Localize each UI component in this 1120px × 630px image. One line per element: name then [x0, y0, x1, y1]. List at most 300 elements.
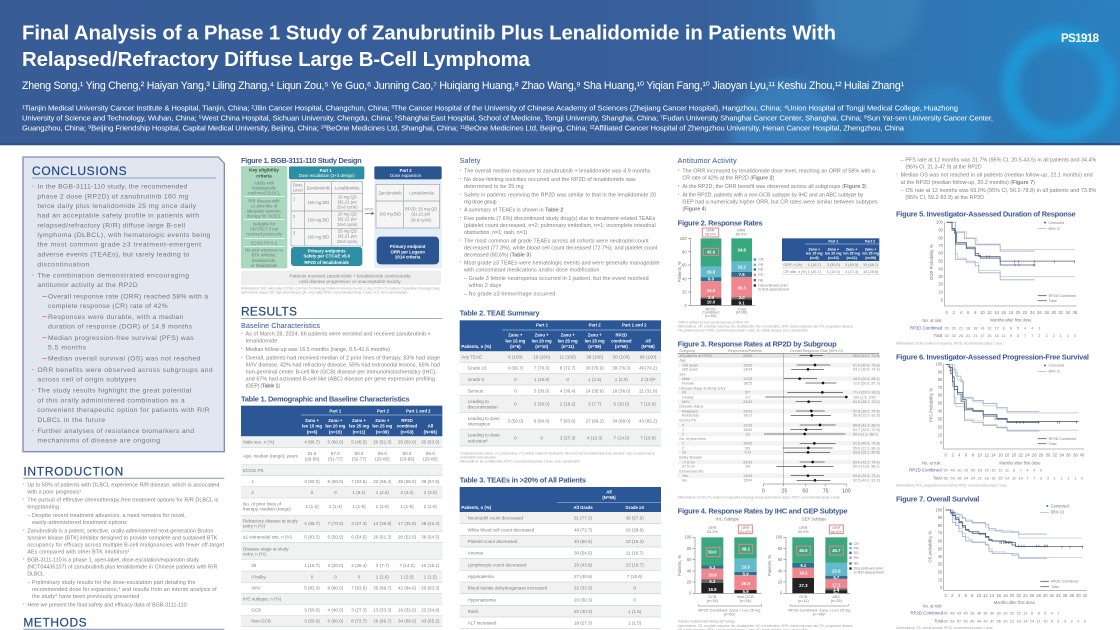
figure 6 number at risk: 15: [985, 469, 989, 473]
figure 2 bar chart: 3.0: [739, 295, 745, 300]
conclusions bullets: relapsed/refractory (R/R) diffuse large B-cell: [37, 222, 185, 229]
forest plot: Refractory: [682, 414, 699, 418]
part 1 dose table: 28-d cycle): [337, 239, 358, 244]
poster title: Relapsed/Refractory Diffuse Large B-Cell Lymphoma: [22, 49, 531, 71]
table 1 body: 4 (66.7): [304, 521, 320, 526]
forest plot: 50.0 (1.3, 98.7): [853, 432, 878, 436]
table 1 body: 3 (7.7): [376, 563, 389, 568]
antitumor bullets: At the RP2D, patients with a non-GCB subtype by IHC and an ABC subtype by: [682, 192, 864, 198]
introduction bullets: with a poor prognosis¹: [26, 489, 81, 495]
antitumor bullets continued: (95% CI, 21.3-47.9) at the RP2D: [905, 164, 982, 170]
part 2 dose table: 160 mg BID: [379, 212, 401, 217]
table 2 body: discontinuation: [468, 404, 498, 409]
figure 5 axes and labels: 20: [1016, 310, 1021, 315]
introduction bullets: BGB-3111-110 is a phase 1, open-label, dose-escalation/expansion study: [27, 558, 199, 564]
figure 6 axes and labels: No. at risk:: [922, 460, 942, 465]
table 1 body: 4 (66.7): [304, 440, 320, 445]
table 1 body: 3 (50.0): [304, 608, 320, 613]
table 1 body: (31-77): [328, 456, 343, 461]
antitumor bullets: (Figure 4): [682, 206, 707, 212]
table 1 header: Zanu +: [352, 418, 367, 423]
results section: [241, 305, 442, 390]
table 2 body: 3 (50.0): [508, 419, 524, 424]
figure 6 axes and labels: 10: [938, 432, 943, 437]
figure 2 ORR table: Zanu +: [846, 247, 857, 251]
affiliations: Guangzhou, China; ⁹Beijing Friendship Hospital, Capital Medical University, Beijing, China; ¹⁰BeOne Medicines Ltd, Shanghai, China; ¹¹BeOne Medicines Ltd, Beijing, China; ¹²Affiliated Cancer Hospital of Zhengzhou University, Henan Cancer Hospital, Zhengzhou, China: [22, 124, 905, 132]
safety bullets: with concomitant medications and/or dose modification: [463, 268, 599, 274]
safety bullets: A summary of TEAEs is shown in Table 2: [464, 208, 563, 214]
table 3 body: 10 (15.2): [626, 539, 644, 544]
figure 2 ORR table: 1 (16.7): [808, 263, 822, 267]
table 1 body: 1 (1-5): [376, 504, 389, 509]
figure 2 ORR table: Zanu +: [809, 247, 820, 251]
figure 6 number at risk: 30: [957, 469, 961, 473]
table 2 body: 6 (100): [508, 354, 523, 359]
table 2 body: 30 (76.9): [586, 366, 604, 371]
safety bullets: ·: [459, 166, 462, 175]
figure 2 ORR table: 10 (25.6): [863, 270, 879, 274]
forest plot: 0: [762, 488, 765, 494]
table 2 body: 7 (14.0): [614, 435, 630, 440]
figure 6 axes and labels: Months after first dose: [999, 460, 1041, 465]
table 2 header: (N=66): [641, 344, 655, 349]
table 2 header: (n=6): [510, 344, 521, 349]
figure 6 axes and labels: 4: [958, 453, 961, 458]
table 1 body: 2 (20.0): [328, 563, 344, 568]
figure 5 legend: Censored: [1048, 221, 1064, 225]
part 2 primary endpoint: ORR per Lugano: [390, 250, 425, 255]
safety bullets: decreased (77.3%), white blood cell count decreased (72.7%), and platelet count: [464, 245, 658, 251]
conclusions bullets: –: [42, 312, 47, 321]
baseline bullets: As of March 28, 2024, 66 patients were enrolled and received zanubrutinib +: [246, 332, 431, 338]
figure 7 number at risk: 6: [1057, 619, 1059, 623]
figure 6 number at risk: 1: [1061, 477, 1063, 481]
figure 6 number at risk: RP2D Combined: [909, 468, 942, 473]
figure 2 title: Figure 2. Response Rates: [678, 218, 763, 227]
figure 1 abbreviations: performance status; HDT, high-dose therapy; QD, once daily; RP2D, recommended phase 2 dose; SCT, stem cell transplant.: [241, 291, 408, 295]
figure 2 bar chart: 15.2: [737, 265, 746, 270]
figure 7 axes and labels: 100: [935, 507, 943, 512]
table 2 body: 0: [514, 389, 517, 394]
safety bullets: The overall median exposure to zanubrutinib + lenalidomide was 4.9 months: [464, 169, 651, 175]
figure 7 number at risk: 2: [1077, 619, 1079, 623]
table 1 body: Disease stage at study: [243, 546, 289, 551]
table 1 body: GCB: [251, 608, 261, 613]
figure 2 bar chart: 2.0: [708, 295, 715, 300]
antitumor bullets continued: Median OS was not reached in all patients (median follow-up, 22.1 months) and: [901, 173, 1093, 179]
treatment note box: Patients received zanubrutinib + lenalidomide continuously: [289, 273, 411, 278]
table 1 body: 7 (14.0): [399, 563, 415, 568]
table 3 body: Rash: [468, 609, 479, 614]
table 2 body: 50 (100): [613, 354, 630, 359]
figure 7 title: Figure 7. Overall Survival: [896, 495, 979, 504]
authors: Zheng Song,¹ Ying Cheng,² Haiyan Yang,³ Liling Zhang,⁴ Liqun Zou,⁵ Ye Guo,⁶ Junning Cao,⁷ Huiqiang Huang,⁸ Zhao Wang,⁹ Sha Huang,¹⁰ Yiqian Fang,¹⁰ Jiaoyan Lyu,¹¹ Keshu Zhou,¹² Huilai Zhang¹: [22, 80, 904, 92]
figure 5 axes and labels: 60: [938, 251, 944, 256]
panel: introduction: [22, 464, 224, 630]
table 3 body: 11 (16.7): [626, 551, 644, 556]
conclusions bullets: –: [42, 354, 47, 363]
figure 6 axes and labels: [922, 361, 1085, 465]
table 2 header: Zanu +: [588, 333, 602, 338]
forest plot: 50: [802, 488, 808, 494]
figure 7 number at risk: 0: [1084, 619, 1086, 623]
figure 6 legend: 95% CI: [1048, 370, 1060, 374]
table 1 body: 55 (83.3): [421, 585, 440, 590]
part 2 dose table: (d1-21 per: [411, 212, 431, 217]
GEP subtype chart: 20: [778, 579, 783, 584]
figure 6 number at risk: 0: [1081, 477, 1083, 481]
figure 5 number at risk: 17: [980, 334, 984, 338]
table 2 header: Part 2: [589, 323, 601, 328]
IHC subtype chart: Non-GCB: [737, 595, 754, 599]
forest plot: Relapsed: [682, 409, 697, 413]
figure 2 bar chart: 34.8: [737, 248, 746, 253]
IHC subtype chart: 60: [687, 557, 692, 562]
GEP subtype chart: 60: [778, 557, 783, 562]
figure 6 axes and labels: 14: [991, 453, 996, 458]
key eligibility criteria: HDT/SCT if not: [250, 226, 279, 231]
table 1 body: 1 (1.5): [424, 574, 437, 579]
table 2 body: 66 (100): [640, 354, 657, 359]
table 3 body: 18 (27.3): [574, 621, 593, 626]
figure 7 axes and labels: 18: [1003, 593, 1008, 598]
figure 2 bar chart: [677, 228, 789, 318]
poster title: Final Analysis of a Phase 1 Study of Zanubrutinib Plus Lenalidomide in Patients With: [22, 22, 836, 44]
forest plot: [678, 349, 880, 494]
figure 6 axes and labels: 80: [938, 377, 943, 382]
table 3 body: 40 (60.6): [574, 539, 593, 544]
GEP subtype chart: 5.7: [833, 589, 840, 594]
figure 5 number at risk: 24: [959, 334, 964, 338]
table 3 body: 22 (33.3): [574, 586, 593, 591]
table 1 header: (n=6): [307, 429, 318, 434]
table 1 body: 1 (16.7): [304, 563, 320, 568]
figure 7 number at risk: 29: [1003, 619, 1007, 623]
antitumor activity heading: Antitumor Activity: [678, 157, 737, 165]
part 2 dose table: [376, 184, 440, 228]
part 1 dose table: 1: [293, 197, 296, 202]
table 1 header: len 25 mg: [372, 424, 393, 429]
figure 5 number at risk: 8: [1010, 326, 1012, 330]
IHC subtype chart: 0: [689, 591, 692, 596]
part 1 header: [289, 166, 364, 179]
table 1 body: 22 (56.4): [373, 479, 392, 484]
figure 5 number at risk: 9: [1010, 334, 1012, 338]
table 2 body: 4 (10.3): [587, 435, 603, 440]
baseline bullets: lenalidomide: [246, 339, 277, 345]
introduction bullets: The pursuit of effective chemotherapy-free treatment options for R/R DLBCL is: [27, 498, 219, 504]
figure 5 axes and labels: No. at risk:: [922, 318, 942, 323]
figure 7 axes and labels: 40: [1076, 593, 1081, 598]
figure 6 number at risk: 16: [978, 469, 982, 473]
IHC subtype chart: ORR: [708, 526, 717, 530]
forest plot: ≥7.5 cm: [682, 465, 695, 469]
safety bullets: –: [464, 276, 467, 282]
key eligibility criteria: [241, 166, 287, 268]
forest plot: 23/42: [743, 400, 752, 404]
figure 6 axes and labels: 28: [1039, 453, 1044, 458]
figure 7 axes and labels: 4: [958, 593, 961, 598]
figure 6 number at risk: 18: [991, 477, 995, 481]
forest plot: 54.2 (32.8, 74.4): [853, 368, 880, 372]
figure 5: duration of response: [896, 210, 1078, 345]
antitumor activity section: [677, 157, 878, 212]
forest plot: Disease stage at study entry: [679, 386, 726, 390]
forest plot: 5/7: [745, 391, 750, 395]
forest plot: Responders/Patients: [728, 349, 762, 353]
part 1 primary endpoints: [291, 247, 362, 266]
table 1 body: 59.0: [378, 451, 387, 456]
conclusions bullets: Median overall survival (OS) was not reached: [48, 356, 201, 363]
safety bullets: The most common all grade TEAEs across all cohorts were neutrophil count: [464, 238, 649, 244]
safety bullets: No dose-limiting toxicities occurred and the RP2D of lenalidomide was: [464, 177, 636, 183]
figure 2 ORR table: len 20 mg: [825, 252, 842, 256]
figure 2 ORR table: (n=6): [810, 256, 819, 260]
table 1 body: 2: [251, 490, 254, 495]
table 1 body: 17 (35.9): [398, 521, 417, 526]
table 1 header: combined: [397, 424, 418, 429]
key eligibility criteria: histologically: [252, 185, 277, 190]
part 1 dose table: Dose: [293, 183, 303, 188]
table 3 header: Patients, n (%): [461, 505, 492, 510]
table 1 header: len 15 mg: [302, 424, 322, 429]
table 2 body: Grade ≥3: [468, 366, 487, 371]
key eligibility criteria: lenalidomide,: [252, 258, 276, 263]
figure 7 axes and labels: 26: [1030, 593, 1035, 598]
conclusions bullets: of this orally administered combination as a: [37, 397, 185, 404]
table 3 body: Lymphocyte count decreased: [468, 562, 527, 567]
table 2 body: [460, 351, 661, 446]
table 2 header: (n=11): [561, 344, 575, 349]
figure 7 axes and labels: 0: [945, 593, 948, 598]
part 1 dose table: Level: [293, 187, 303, 192]
figure 2 bar chart: 10.0: [707, 300, 716, 305]
conclusions bullets: ·: [32, 270, 34, 279]
figure 7 number at risk: 66: [944, 619, 948, 623]
figure 6 number at risk: 7: [1020, 469, 1022, 473]
table 1 body: 3 (50.0): [304, 479, 320, 484]
table 2 header: Zanu +: [535, 333, 549, 338]
figure 1 abbreviations: [241, 287, 440, 295]
IHC subtype chart: 100: [684, 535, 692, 540]
figure 5 number at risk: 12: [995, 326, 999, 330]
GEP subtype chart: 45.5%: [798, 530, 809, 534]
figure 5 axes and labels: 2: [953, 310, 956, 315]
table 1 header: Part 2: [377, 408, 390, 413]
figure 7 number at risk: 12: [1023, 611, 1027, 615]
figure 2 bar chart: 7.6: [739, 272, 745, 277]
key eligibility criteria: Key eligibility: [249, 168, 279, 173]
figure 6 number at risk: 1: [1074, 477, 1076, 481]
figure 6 axes and labels: 40: [1080, 453, 1085, 458]
figure 6 number at risk: 12: [998, 469, 1002, 473]
table 2 body: 10 (100): [533, 354, 551, 359]
forest plot: 50.0 (11.8, 88.2): [853, 465, 880, 469]
antitumor bullets continued: [896, 157, 1097, 201]
table 2 body: 1 (2.0): [615, 377, 628, 382]
figure 7 legend: RP2D Combined: [1051, 580, 1078, 584]
GEP subtype chart: ABC: [832, 595, 841, 599]
forest plot: 1/2: [745, 432, 750, 436]
table 1 body: 7 (63.6): [351, 479, 367, 484]
figure 6 number at risk: 7: [1026, 477, 1028, 481]
table 1 body: 20 (51.3): [373, 535, 392, 540]
introduction bullets: occupancy for efficacy across multiple B-cell malignancies with fewer off-target: [27, 542, 224, 548]
conclusions bullets: discontinuation: [37, 261, 90, 268]
GEP subtype chart: 5.7: [833, 575, 840, 580]
introduction bullets: easily-administered treatment options: [32, 520, 127, 526]
table 1 body: I/II: [251, 563, 256, 568]
figure 6 number at risk: 1: [1067, 477, 1069, 481]
part 1 dose table: (d1-21 per: [338, 217, 358, 222]
table 1 body: 1: [251, 479, 254, 484]
figure 7 number at risk: 29: [1003, 611, 1007, 615]
figure 6 number at risk: 15: [998, 477, 1002, 481]
table 1 body: 6 (60.0): [328, 479, 344, 484]
figure 2 legend: Discontinued prior: [758, 284, 789, 288]
figure 7 axes and labels: 34: [1056, 593, 1061, 598]
table 3 body: [460, 512, 661, 629]
forest plot: 1: [682, 442, 684, 446]
figure 4 legend: SD: [854, 551, 859, 555]
table 2 header: RP2D: [616, 333, 627, 338]
IHC subtype chart: 5.9: [743, 571, 749, 576]
table 2 body: 5 (10.0): [614, 402, 630, 407]
table 2 footnotes: [460, 451, 655, 463]
figure 7 axes and labels: 6: [965, 593, 968, 598]
table 3 body: Hyponatremia: [468, 597, 496, 602]
forest plot: Bulky disease: [679, 455, 702, 459]
conclusions bullets: Median progression-free survival (PFS) was: [48, 335, 194, 342]
table 3 body: 1 (1.5): [628, 609, 642, 614]
figure 2 bar chart: 42.0: [707, 249, 716, 254]
table 1 body: 2 (1-4): [329, 504, 342, 509]
figure 7 number at risk: 30: [990, 611, 994, 615]
table 3 body: 20 (30.3): [574, 609, 593, 614]
introduction bullets: AEs compared with other BTK inhibitors²: [27, 549, 130, 555]
forest plot: 3/6: [745, 465, 750, 469]
table 3 body: Anemia: [468, 551, 483, 556]
figure 6 number at risk: 21: [978, 477, 982, 481]
introduction bullets: ·: [22, 555, 25, 564]
figure 5 KM curves: [947, 222, 1075, 280]
key eligibility criteria: Ineligible for: [253, 221, 276, 226]
figure 6 number at risk: 4: [1026, 469, 1029, 473]
figure 6 number at risk: 14: [1005, 477, 1010, 481]
figure 6 number at risk: 66: [944, 477, 948, 481]
figure 6 legend: RP2D Combined: [1049, 437, 1076, 441]
table 3 body: 7 (10.6): [627, 574, 643, 579]
arrow: part 1 to part 2: [365, 208, 374, 215]
figure 5 number at risk: 14: [980, 326, 985, 330]
table 1 body: 43 (65.2): [421, 619, 440, 624]
figure 2 ORR table: 1 (10.0): [827, 270, 841, 274]
forest plot: 71.4 (29.0, 96.3): [853, 391, 880, 395]
IHC subtype chart: 6.3: [709, 565, 716, 570]
figure 7 number at risk: Total: [934, 618, 943, 623]
forest plot: <7.5 cm: [682, 460, 695, 464]
figure 2 ORR table: 5 (45.5): [845, 263, 859, 267]
antitumor bullets continued: (95% CI, 59.2-83.9) at the RP2D: [905, 195, 984, 201]
figure 4 footnotes: Abbreviations: CR, complete response; len, lenalidomide; NE, not estimable; ORR, overall response rate; PD, progressive disease;: [678, 624, 853, 628]
forest plot: 13/24: [743, 368, 752, 372]
table 1 body: 4 (36.4): [351, 563, 367, 568]
figure 2 legend: CR: [758, 258, 764, 262]
table 2 header: (n=10): [535, 344, 549, 349]
IHC subtype chart: 40: [687, 568, 692, 573]
table 2 body: 7 (10.6): [640, 402, 656, 407]
figure 5 axes and labels: [922, 220, 1078, 323]
key eligibility criteria: criteria: [256, 174, 272, 179]
figure 2 ORR table: (n=10): [828, 256, 839, 260]
figure 5 number at risk: 29: [945, 326, 949, 330]
introduction bullets: Here we present the final safety and efficacy data of BGB-3111-110: [27, 602, 187, 608]
introduction bullets: ·: [22, 525, 25, 534]
conclusions bullets: ORR benefits were observed across subgroups and: [37, 367, 213, 374]
GEP subtype chart: 9.1: [800, 563, 807, 568]
figure 6 number at risk: 1: [1054, 477, 1056, 481]
figure 2 ORR table: Part 2: [865, 239, 875, 243]
forest plot: Male: [682, 377, 690, 381]
introduction bullets: ·: [22, 599, 25, 608]
table 2 header: All: [645, 338, 651, 343]
conclusions bullets: ·: [32, 386, 34, 395]
table 3 header: [460, 487, 661, 512]
table 1 body: 8 (80.0): [328, 585, 344, 590]
forest plot: 100 (2.5, 100): [853, 395, 876, 399]
figure 3 title: Figure 3. Response Rates at RP2D by Subgroup: [678, 340, 837, 349]
figure 7 axes and labels: 38: [1069, 593, 1075, 598]
figure 7 number at risk: 44: [977, 619, 982, 623]
key eligibility criteria: R/R disease with: [248, 198, 280, 203]
IHC subtype chart: 26.5: [741, 581, 750, 586]
table 2 body: 11 (100): [559, 354, 576, 359]
figure 6 number at risk: 11: [1012, 477, 1016, 481]
forest plot: 53.8 (25.1, 80.8): [853, 451, 880, 455]
table 1 header: RP2D: [401, 418, 413, 423]
table 1 body: 5 (45.5): [351, 440, 367, 445]
GEP subtype chart: ORR: [799, 526, 808, 530]
table 2 body: 7 (70.0): [534, 366, 550, 371]
figure 2 ORR table: (n=11): [846, 256, 858, 260]
figure 2 bar chart: (N=66): [736, 311, 748, 315]
table 1 body: 1 (1-5): [352, 504, 366, 509]
table 3 body: Neutrophil count decreased: [468, 516, 523, 521]
forest plot: Subgroup: [679, 349, 695, 353]
table 2 body: 18 (36.0): [612, 389, 631, 394]
figure 7 axes and labels: 80: [938, 523, 943, 528]
forest plot: 57.6 (39.2, 74.5): [853, 409, 880, 413]
table 1 body: 8 (72.7): [351, 619, 367, 624]
conclusions bullets: convenient therapeutic option for patients with R/R: [37, 407, 210, 414]
table 3 body: 27 (40.9): [574, 574, 593, 579]
table 3 body: 19 (28.8): [626, 527, 644, 532]
figure 7 number at risk: 21: [1010, 619, 1014, 623]
safety bullets: [459, 166, 660, 297]
introduction bullets: Preliminary study results for the dose-escalation part detailing the: [32, 580, 195, 586]
figure 7 number at risk: 1: [1057, 611, 1059, 615]
figure 6 axes and labels: 8: [972, 453, 975, 458]
figure 6 number at risk: 7: [1033, 477, 1035, 481]
IHC subtype chart: 53.3%: [707, 530, 718, 534]
figure 7 number at risk: 36: [977, 611, 981, 615]
table 3 body: ALT increased: [468, 621, 497, 626]
table 1 body: 16 (32.0): [398, 608, 417, 613]
table 1 body: 0: [311, 490, 314, 495]
figure 7 number at risk: 8: [1051, 619, 1053, 623]
antitumor bullets: [677, 166, 878, 212]
figure 2 ORR table: len 15 mg: [806, 252, 823, 256]
